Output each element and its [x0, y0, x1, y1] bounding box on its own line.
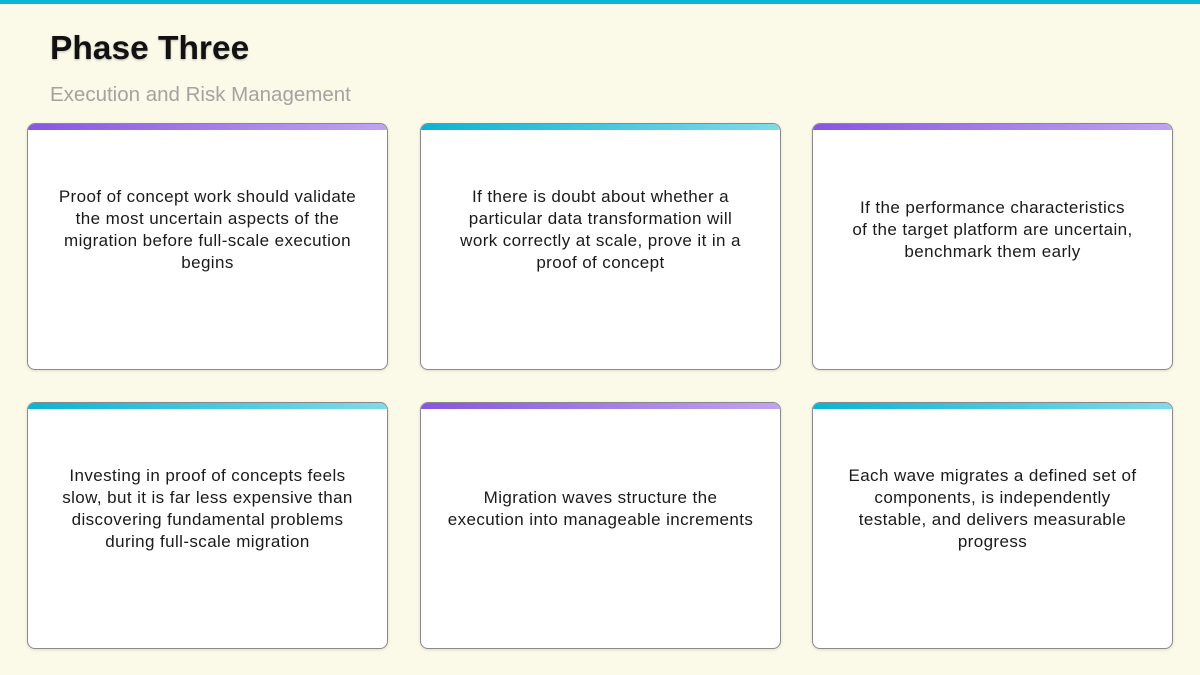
card 2: proof of concept: [536, 252, 665, 272]
top accent bar: [0, 0, 1200, 4]
subtitle: Execution and Risk Management: [50, 83, 351, 106]
card 3: If the performance characteristics: [860, 198, 1125, 216]
title: Phase Three: [50, 30, 249, 67]
card 1: Proof of concept work should validate: [59, 186, 356, 206]
card 2: particular data transformation will: [469, 208, 732, 228]
card 6: components, is independently: [874, 488, 1111, 506]
card 4: slow, but it is far less expensive than: [62, 488, 353, 506]
card 3: [812, 123, 1173, 370]
card 5: execution into manageable increments: [448, 510, 753, 528]
card 6: [812, 402, 1173, 649]
card 1: migration before full-scale execution: [64, 230, 351, 250]
card 5: Migration waves structure the: [484, 488, 717, 506]
card 3: of the target platform are uncertain,: [852, 220, 1133, 238]
card 1: the most uncertain aspects of the: [76, 208, 339, 228]
card 4: during full-scale migration: [105, 532, 310, 550]
card 3: benchmark them early: [904, 242, 1081, 260]
card 6: progress: [958, 532, 1027, 550]
card 6: testable, and delivers measurable: [859, 510, 1126, 528]
card 5: [420, 402, 781, 649]
card 6: Each wave migrates a defined set of: [848, 466, 1137, 484]
card 1: [27, 123, 388, 370]
card 2: [420, 123, 781, 370]
card 1: begins: [181, 252, 234, 272]
card 2: work correctly at scale, prove it in a: [460, 230, 741, 250]
card 4: [27, 402, 388, 649]
card 2: If there is doubt about whether a: [472, 186, 729, 206]
card 4: discovering fundamental problems: [72, 510, 343, 528]
card 4: Investing in proof of concepts feels: [69, 466, 346, 484]
